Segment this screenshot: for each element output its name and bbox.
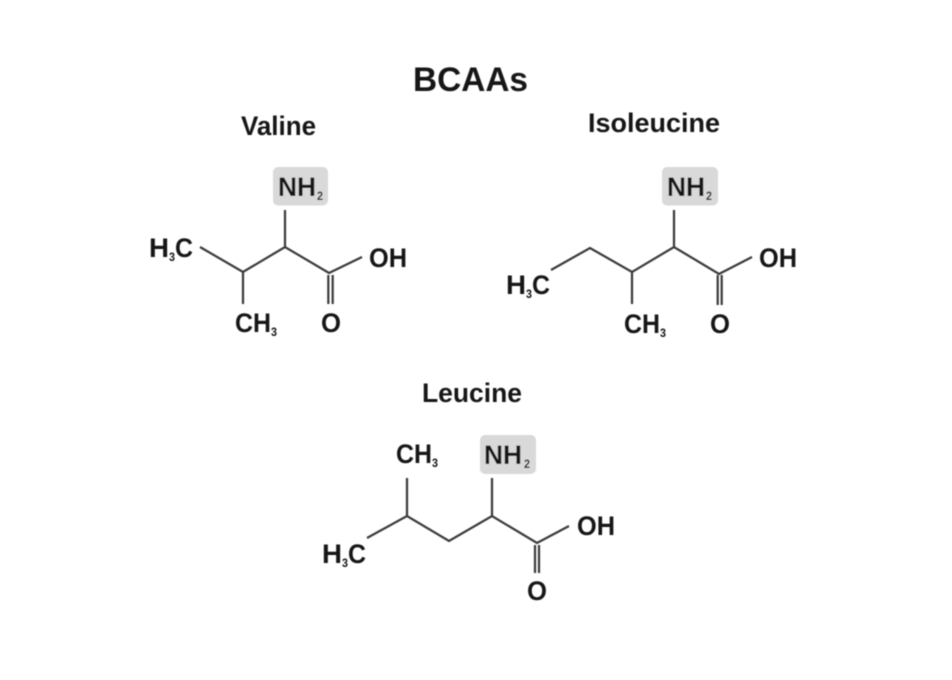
group label: H3C: [322, 539, 366, 570]
group label: CH3: 3: [271, 325, 277, 339]
group label: H3C: [506, 270, 550, 301]
atom label: O: O: [527, 576, 547, 606]
amine highlight: leucine: 2: [524, 457, 530, 471]
group label: H3C: C: [175, 233, 193, 263]
amine highlight: leucine: [480, 435, 536, 474]
heading: valine: Valine: [241, 111, 316, 141]
group label: OH: OH: [577, 511, 615, 541]
heading: leucine: Leucine: [422, 378, 522, 408]
group label: H3C: 3: [342, 556, 348, 570]
group label: H3C: H: [506, 270, 526, 300]
group label: CH3: 3: [660, 326, 666, 340]
amine highlight: leucine: NH: [484, 440, 522, 470]
group label: CH3: 3: [432, 456, 438, 470]
group label: H3C: C: [348, 539, 366, 569]
group label: CH3: CH: [235, 308, 271, 338]
heading: isoleucine: Isoleucine: [588, 108, 720, 138]
amine highlight: isoleucine: 2: [706, 189, 712, 203]
panel: isoleucine: [506, 108, 797, 340]
group label: CH3: CH: [396, 439, 432, 469]
group label: OH: OH: [369, 243, 407, 273]
title: BCAAs: [413, 61, 528, 99]
amine highlight: valine: NH: [278, 172, 316, 202]
skeletal bonds: isoleucine: [551, 210, 752, 305]
skeletal bonds: valine: [200, 210, 362, 304]
atom label: O: O: [710, 309, 730, 339]
panel: leucine: [322, 378, 615, 606]
group label: CH3: CH: [624, 309, 660, 339]
group label: H3C: H: [149, 233, 169, 263]
amine highlight: valine: 2: [317, 189, 323, 203]
group label: H3C: H: [322, 539, 342, 569]
amine highlight: isoleucine: [662, 167, 718, 206]
group label: H3C: 3: [169, 250, 175, 264]
group label: H3C: C: [532, 270, 550, 300]
amine highlight: isoleucine: NH: [667, 172, 705, 202]
amine highlight: valine: [273, 167, 328, 206]
panel: valine: [149, 111, 407, 339]
group label: H3C: 3: [526, 287, 532, 301]
skeletal bonds: leucine: [367, 478, 569, 573]
atom label: O: O: [321, 308, 341, 338]
group label: OH: OH: [759, 243, 797, 273]
group label: H3C: [149, 233, 193, 264]
